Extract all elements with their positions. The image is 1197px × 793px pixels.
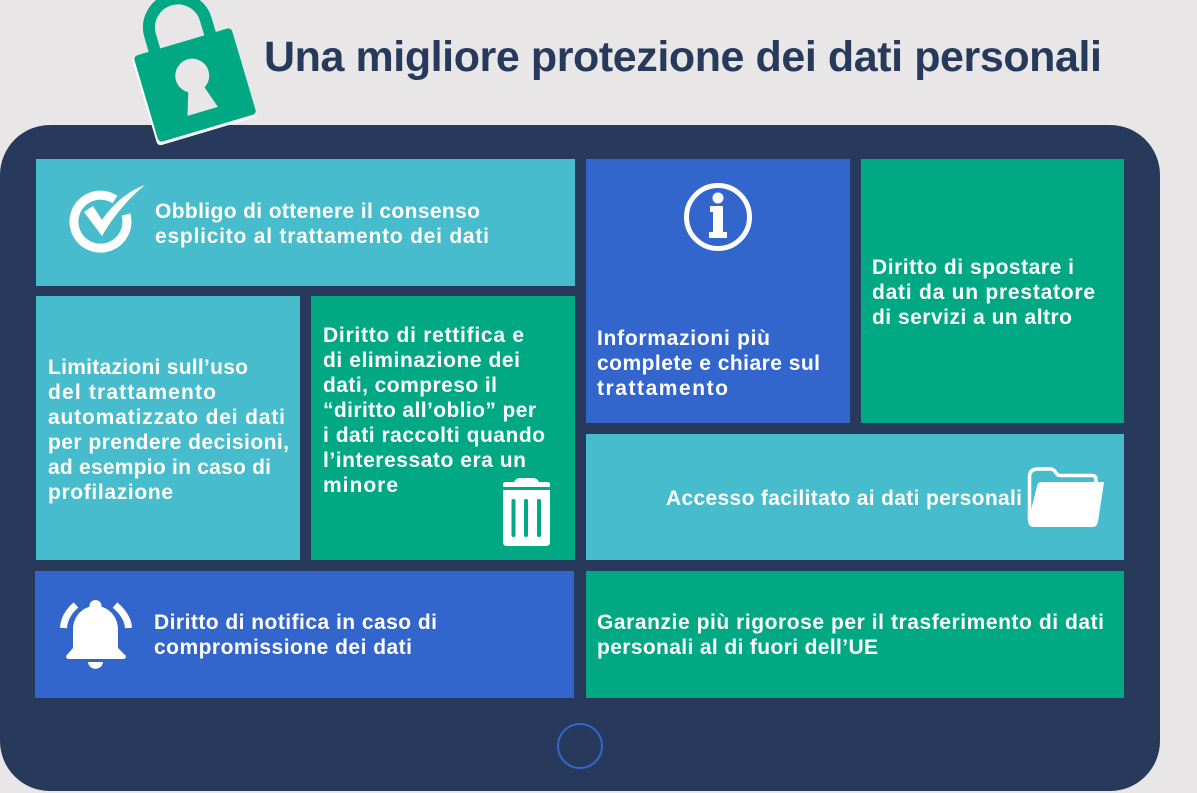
text: breach notification: compromissione dei dati (154, 636, 412, 659)
text: automated processing: del trattamento (48, 381, 216, 404)
text: portability: di servizi a un altro (872, 306, 1072, 329)
text: portability: dati da un prestatore (872, 281, 1095, 304)
text: information: complete e chiare sul (597, 352, 820, 375)
panel: breach notification (35, 571, 574, 698)
text: rectification and erasure: minore (323, 474, 398, 497)
icon: bell (64, 600, 128, 669)
panel: rectification and erasure (311, 296, 575, 560)
panel: consent (36, 159, 575, 286)
icon: information (686, 186, 750, 248)
text: portability: Diritto di spostare i (872, 256, 1074, 279)
text: rectification and erasure: i dati raccolti quando (323, 424, 545, 447)
panel: portability (861, 159, 1124, 423)
text: breach notification: Diritto di notifica in caso di (154, 611, 437, 634)
text: rectification and erasure: di eliminazione dei (323, 349, 520, 372)
text: information: Informazioni più (597, 327, 770, 350)
text: consent: Obbligo di ottenere il consenso (155, 200, 480, 223)
text: automated processing: profilazione (48, 481, 173, 504)
home button (558, 724, 602, 768)
text: rectification and erasure: l’interessato era un (323, 449, 526, 472)
icon: folder (1028, 469, 1104, 527)
text: access: Accesso facilitato ai dati personali (666, 487, 1022, 510)
text: transfers outside EU: Garanzie più rigorose per il trasferimento di dati (597, 611, 1104, 634)
text: transfers outside EU: personali al di fuori dell’UE (597, 636, 878, 659)
panel: information (586, 159, 850, 423)
text: automated processing: per prendere decisioni, (48, 431, 289, 454)
panel: automated processing (36, 296, 300, 560)
text: automated processing: ad esempio in caso di (48, 456, 271, 479)
panel: transfers outside EU (586, 571, 1124, 698)
text: consent: esplicito al trattamento dei dati (155, 225, 489, 248)
title: Una migliore protezione dei dati personali (264, 33, 1102, 81)
text: rectification and erasure: “diritto all’oblio” per (323, 399, 536, 422)
icon: trash bin (503, 478, 550, 546)
icon: padlock (119, 0, 258, 146)
panel: access (586, 434, 1124, 560)
text: information: trattamento (597, 377, 728, 400)
text: rectification and erasure: dati, compreso il (323, 374, 497, 397)
text: automated processing: automatizzato dei dati (48, 406, 285, 429)
icon: check mark (74, 185, 145, 248)
text: rectification and erasure: Diritto di rettifica e (323, 324, 524, 347)
text: automated processing: Limitazioni sull’uso (48, 356, 248, 379)
